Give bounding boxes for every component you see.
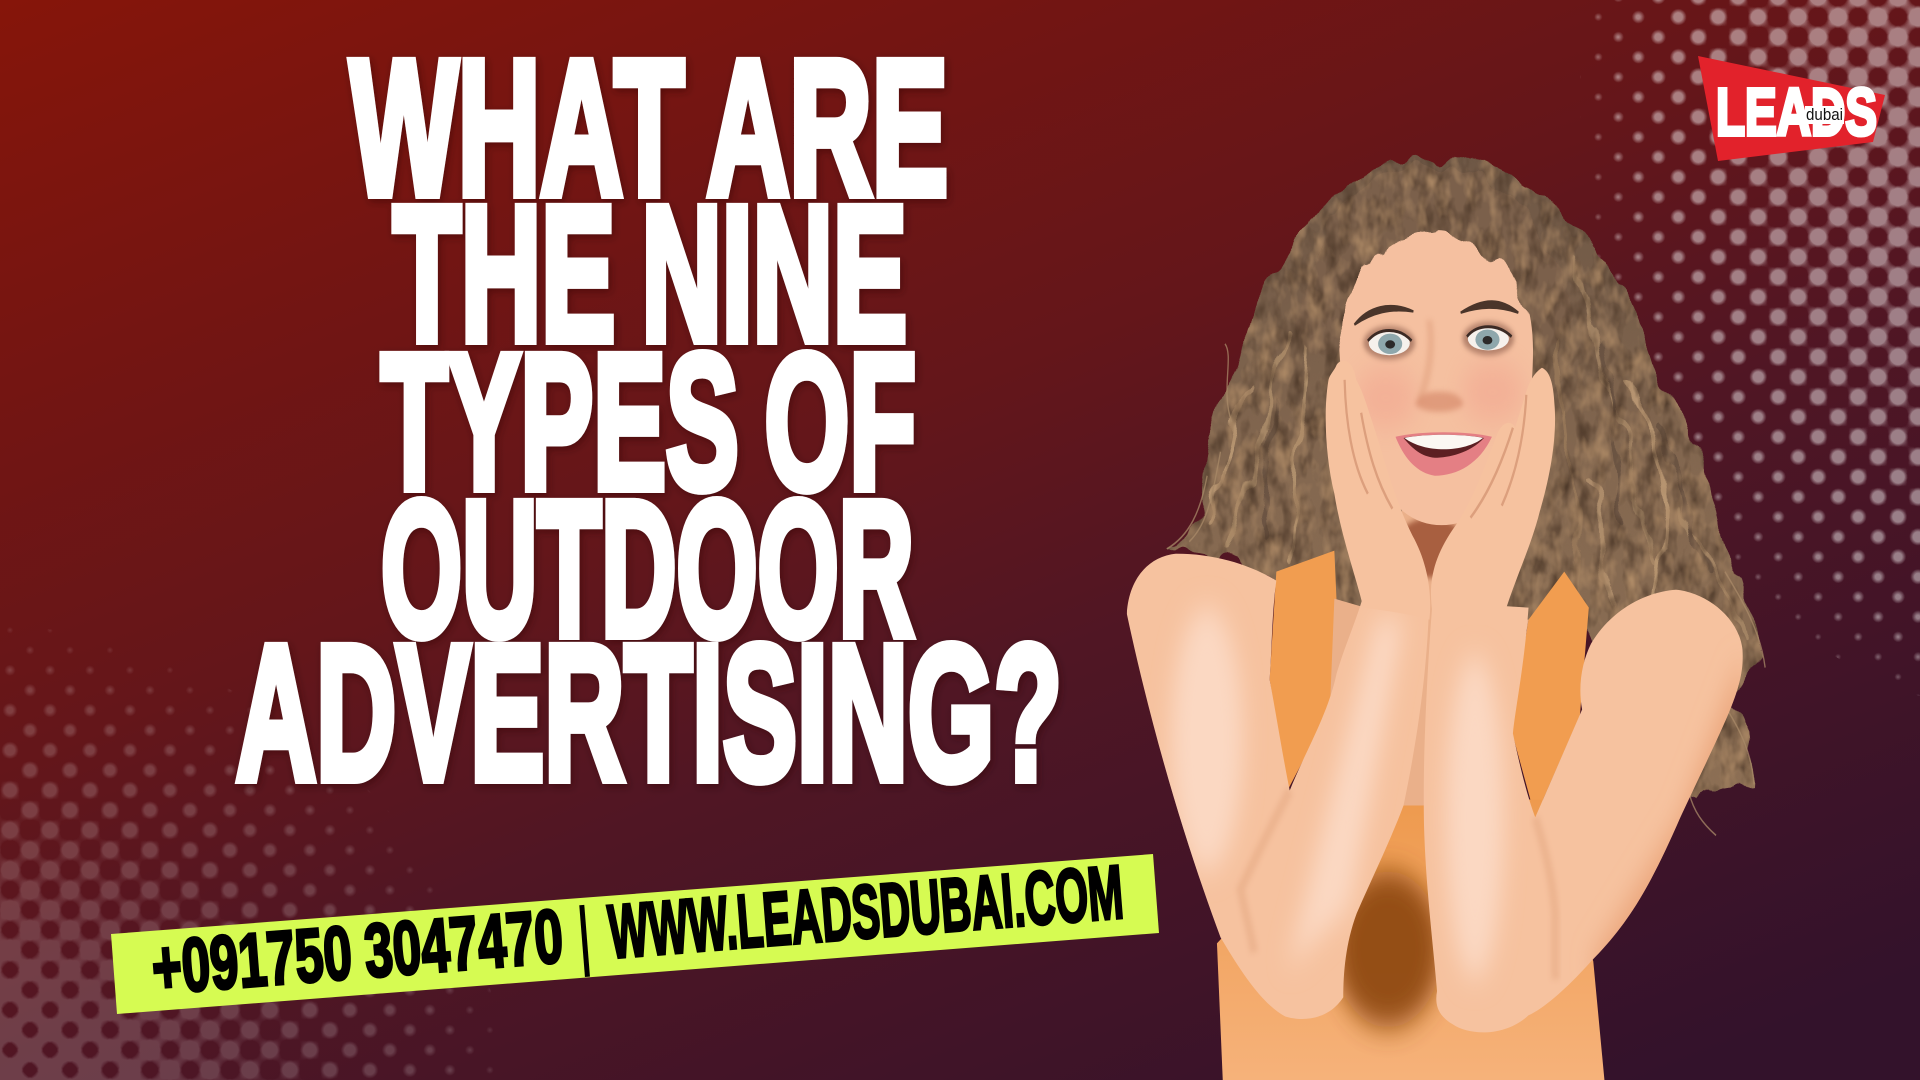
cheeks glow right — [1462, 362, 1524, 422]
right forearm highlight — [1446, 656, 1504, 979]
separator: | — [575, 892, 593, 978]
shirt shadow — [1334, 871, 1441, 1027]
logo red badge — [1698, 56, 1885, 161]
front hair framing the face — [1296, 164, 1573, 362]
banner background — [111, 854, 1159, 1014]
title line 5: ADVERTISING? — [236, 605, 1062, 820]
title line 4: OUTDOOR — [381, 461, 914, 676]
face — [1339, 230, 1533, 525]
left forearm highlight — [1287, 620, 1404, 967]
right eye — [1462, 322, 1514, 355]
title line 3: TYPES OF — [381, 314, 916, 529]
neck and chest — [1330, 500, 1529, 805]
right hand — [1431, 368, 1555, 626]
left fingers — [1345, 380, 1392, 509]
hair wisps — [1167, 344, 1765, 835]
left arm crease — [1241, 790, 1290, 952]
orange tank top — [1217, 551, 1604, 1080]
left arm — [1126, 554, 1428, 1019]
title line 2: THE NINE — [393, 166, 907, 381]
logo dubai word: dubai — [1806, 105, 1843, 124]
left brow — [1354, 306, 1413, 325]
hair strands — [1207, 260, 1743, 638]
halftone dots: bottom left — [0, 600, 540, 1080]
right upper arm shading — [1590, 670, 1742, 962]
nose bridge shading — [1417, 320, 1434, 404]
website: WWW.LEADSDUBAI.COM — [605, 850, 1126, 975]
title — [236, 20, 1062, 820]
right arm — [1424, 590, 1743, 1032]
halftone dots: top right — [1500, 0, 1920, 760]
contact banner — [111, 850, 1159, 1014]
left eye — [1363, 326, 1415, 359]
logo dubai backing — [1805, 106, 1844, 124]
right fingers — [1471, 395, 1526, 518]
left hand — [1326, 361, 1430, 620]
neck shadow — [1395, 518, 1466, 578]
right arm crease — [1535, 817, 1555, 979]
hair back — [1171, 159, 1765, 805]
nose — [1415, 392, 1464, 412]
title line 1: WHAT ARE — [350, 20, 948, 235]
right brow — [1461, 301, 1518, 313]
logo: Leads Dubai — [1698, 56, 1885, 161]
mouth — [1396, 432, 1492, 476]
banner text — [149, 850, 1126, 1012]
cheeks glow — [1354, 368, 1417, 428]
left arm highlight — [1171, 608, 1243, 871]
woman photo illustration — [1100, 159, 1770, 1080]
phone number: +091750 3047470 — [149, 894, 566, 1011]
